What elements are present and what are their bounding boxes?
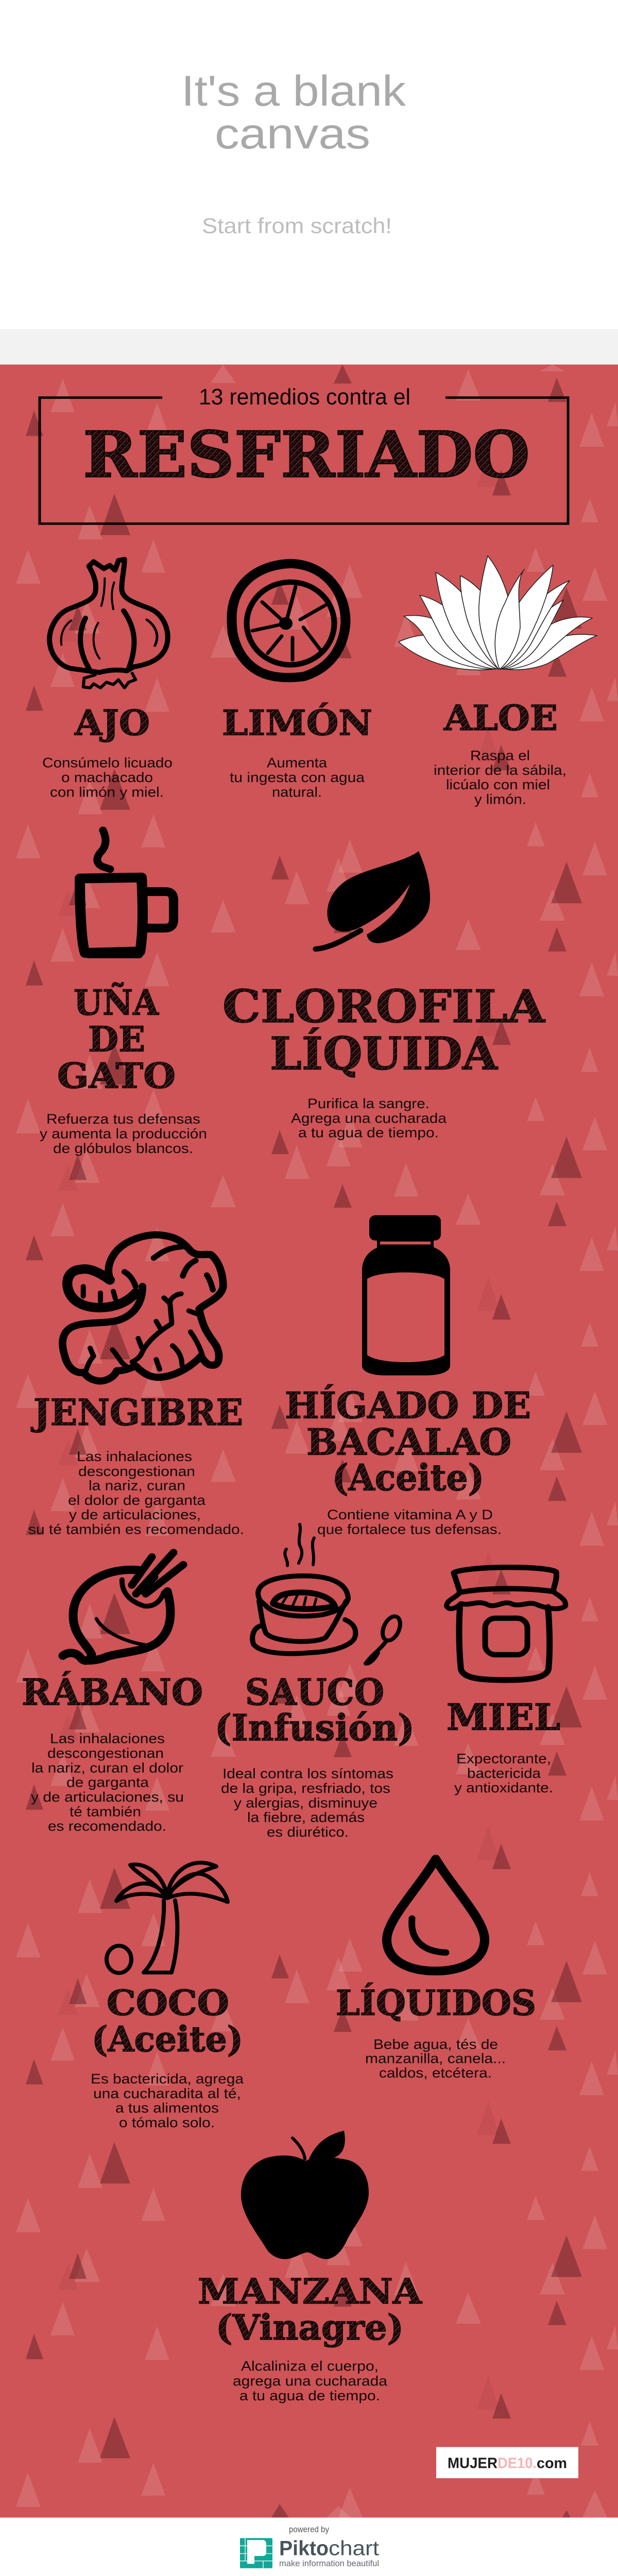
- heading: GATO: [57, 1056, 176, 1096]
- footer background: [0, 2518, 618, 2576]
- text block: [317, 1507, 502, 1537]
- heading: [198, 2272, 422, 2348]
- text block: que fortalece tus defensas.: [317, 1521, 502, 1537]
- text block: Consúmelo licuado: [42, 755, 173, 771]
- text block: [365, 2037, 506, 2081]
- text block: Ideal contra los síntomas: [222, 1766, 393, 1782]
- panel: higado de bacalao: [285, 1215, 531, 1537]
- text block: la nariz, curan el dolor: [31, 1760, 183, 1775]
- text block: y antioxidante.: [454, 1780, 553, 1795]
- panel: title frame: [40, 384, 568, 523]
- text block: agrega una cucharada: [233, 2373, 388, 2388]
- text block: [434, 748, 566, 807]
- panel: manzana vinagre: [198, 2131, 422, 2403]
- heading: It's a blank canvas: [181, 67, 406, 158]
- heading: BACALAO: [306, 1421, 511, 1463]
- text block: o tómalo solo.: [119, 2115, 215, 2130]
- frame: [40, 398, 568, 523]
- text block: [221, 1766, 393, 1840]
- heading: ALOE: [443, 698, 558, 738]
- text block: la fiebre, además: [247, 1809, 365, 1825]
- text block: Contiene vitamina A y D: [327, 1507, 493, 1522]
- icon: radish: [63, 1552, 183, 1660]
- panel: sauco infusion: [215, 1524, 415, 1840]
- text: powered by: powered by: [289, 2524, 329, 2534]
- text block: el dolor de garganta: [68, 1493, 206, 1508]
- icon: cup with steam and spoon: [252, 1524, 404, 1664]
- panel: una de gato: [40, 831, 207, 1156]
- heading: [57, 982, 176, 1096]
- heading: HÍGADO DE: [285, 1384, 531, 1427]
- text: Piktochart: [279, 2536, 380, 2560]
- text block: natural.: [272, 784, 322, 800]
- icon: apple: [241, 2131, 369, 2259]
- text block: descongestionan: [47, 1745, 164, 1761]
- text block: licúalo con miel: [446, 777, 550, 792]
- logo: mujerde10: com: [537, 2455, 567, 2471]
- text: Piktochart: chart: [329, 2536, 380, 2560]
- heading: LÍQUIDOS: [336, 1982, 536, 2023]
- text block: y de articulaciones, su: [31, 1789, 184, 1805]
- heading: (Vinagre): [216, 2308, 404, 2348]
- icon: honey jar: [447, 1567, 565, 1680]
- icon: steaming mug: [80, 831, 174, 954]
- text block: [42, 755, 173, 800]
- heading: JENGIBRE: [30, 1391, 243, 1433]
- panel: ajo: [42, 560, 173, 800]
- text block: Las inhalaciones: [77, 1449, 192, 1464]
- text block: Raspa el: [470, 748, 530, 763]
- text block: [40, 1111, 207, 1156]
- text block: la nariz, curan: [89, 1478, 185, 1493]
- icon: palm tree and coconut: [107, 1862, 228, 1973]
- subtitle: 13 remedios contra el: [199, 384, 410, 410]
- panel: coco aceite: [91, 1862, 244, 2130]
- text block: [91, 2071, 244, 2130]
- text block: [233, 2358, 388, 2403]
- text block: descongestionan: [78, 1464, 195, 1479]
- text block: Expectorante,: [456, 1751, 551, 1766]
- text block: una cucharadita al té,: [93, 2086, 241, 2101]
- heading: COCO: [107, 1983, 229, 2023]
- heading: (Aceite): [92, 2020, 243, 2060]
- heading: RÁBANO: [22, 1671, 203, 1714]
- logo: mujerde10: [436, 2447, 578, 2478]
- icon: lemon slice: [232, 564, 346, 677]
- text block: o machacado: [61, 770, 153, 785]
- heading: [222, 980, 546, 1080]
- heading: (Aceite): [332, 1456, 484, 1499]
- text block: de glóbulos blancos.: [53, 1141, 193, 1156]
- text block: Es bactericida, agrega: [91, 2071, 244, 2087]
- icon: leaf: [316, 851, 430, 949]
- text block: [454, 1751, 553, 1795]
- heading: It's a blank canvas: It's a blank: [181, 67, 406, 115]
- text block: a tu agua de tiempo.: [239, 2388, 380, 2403]
- text block: manzanilla, canela...: [365, 2050, 506, 2066]
- panel: jengibre: [28, 1235, 244, 1537]
- text block: [31, 1731, 184, 1834]
- panel: clorofila liquida: [222, 851, 546, 1140]
- logo: mujerde10: DE10.: [497, 2455, 537, 2471]
- heading: UÑA: [74, 982, 159, 1023]
- heading: LIMÓN: [222, 702, 372, 743]
- heading: [215, 1671, 415, 1749]
- icon: bottle: [362, 1215, 450, 1376]
- text: Start from scratch: Start from scratch!: [202, 214, 392, 238]
- main title: RESFRIADO: [83, 417, 530, 492]
- white background: [0, 0, 618, 329]
- text block: y alergias, disminuye: [234, 1795, 377, 1810]
- heading: SAUCO: [245, 1671, 384, 1714]
- panel: rabano: [22, 1552, 203, 1834]
- footer: powered by piktochart: [0, 2518, 618, 2576]
- text: Piktochart: Pikto: [279, 2536, 329, 2560]
- panel: liquidos: [336, 1859, 536, 2081]
- grey band: [0, 329, 618, 365]
- text block: té también: [70, 1804, 141, 1819]
- heading: DE: [88, 1019, 145, 1060]
- text block: a tus alimentos: [115, 2100, 219, 2116]
- heading: MANZANA: [198, 2272, 422, 2312]
- text block: Aumenta: [267, 755, 328, 771]
- text: tagline: make information beautiful: [279, 2558, 379, 2568]
- heading: LÍQUIDA: [270, 1027, 499, 1080]
- text block: Refuerza tus defensas: [46, 1111, 200, 1127]
- text block: Bebe agua, tés de: [373, 2037, 498, 2052]
- heading: (Infusión): [215, 1706, 415, 1749]
- text block: [230, 755, 365, 800]
- text block: Agrega una cucharada: [291, 1110, 447, 1126]
- text block: Las inhalaciones: [50, 1731, 165, 1747]
- panel: miel: [447, 1567, 565, 1795]
- heading: [285, 1384, 531, 1499]
- text block: tu ingesta con agua: [230, 770, 365, 785]
- text block: es recomendado.: [48, 1818, 166, 1834]
- text block: [291, 1096, 447, 1140]
- heading: [92, 1983, 243, 2060]
- heading: MIEL: [447, 1696, 560, 1738]
- text block: a tu agua de tiempo.: [298, 1125, 439, 1140]
- text block: con limón y miel.: [50, 784, 164, 800]
- text block: y aumenta la producción: [40, 1126, 207, 1141]
- panel: aloe: [399, 556, 597, 807]
- panel: limon: [222, 564, 372, 800]
- heading: AJO: [74, 703, 150, 743]
- logo: mujerde10: MUJER: [448, 2455, 497, 2471]
- text block: es diurético.: [267, 1824, 349, 1840]
- text block: [28, 1449, 244, 1537]
- text block: Alcaliniza el cuerpo,: [241, 2358, 379, 2374]
- heading: CLOROFILA: [222, 980, 546, 1033]
- text block: de garganta: [66, 1774, 149, 1790]
- text block: bactericida: [467, 1766, 541, 1781]
- text block: su té también es recomendado.: [28, 1521, 244, 1537]
- icon: piktochart logo: [240, 2538, 272, 2568]
- text block: y limón.: [474, 791, 526, 807]
- text block: de la gripa, resfriado, tos: [221, 1781, 390, 1796]
- text block: interior de la sábila,: [434, 762, 566, 778]
- heading: It's a blank canvas: canvas: [215, 110, 370, 158]
- icon: water drop: [387, 1859, 485, 1971]
- panel: blank canvas placeholder: [0, 0, 618, 329]
- text block: caldos, etcétera.: [379, 2065, 492, 2081]
- icon: garlic: [49, 560, 168, 688]
- icon: ginger root: [62, 1235, 223, 1381]
- text block: y de articulaciones,: [69, 1507, 201, 1522]
- text block: Purifica la sangre.: [307, 1096, 430, 1111]
- icon: aloe plant: [399, 556, 597, 670]
